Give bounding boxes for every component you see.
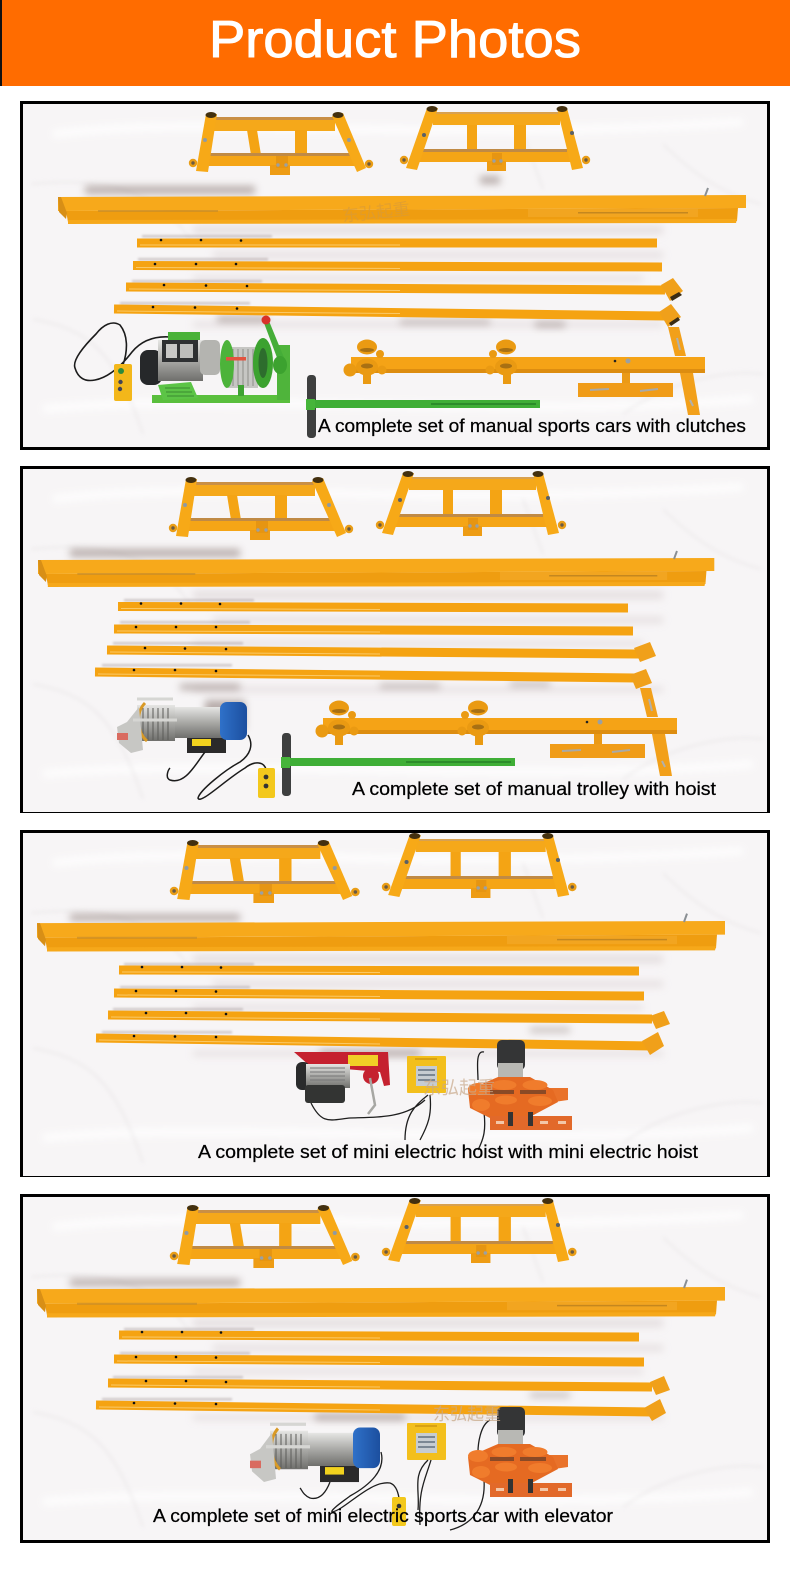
control cord [75, 323, 170, 380]
left trestle frame [170, 840, 360, 903]
rod end brackets [630, 642, 656, 689]
lower trolley assembly [316, 688, 677, 776]
title: Product Photos [209, 11, 581, 69]
panel: manual sports car set with clutch winch [22, 102, 768, 448]
watermark: 东弘起重 [423, 1078, 495, 1098]
shadows [70, 549, 550, 730]
shadows [70, 914, 570, 1056]
main beam [37, 914, 725, 951]
green hand crank [306, 375, 540, 438]
orange electric trolley [468, 1407, 572, 1497]
caption: A complete set of mini electric sports car with elevator [153, 1505, 613, 1526]
main beam [58, 188, 746, 224]
right trestle frame [400, 106, 590, 171]
rods [114, 239, 665, 316]
rod end brackets [642, 1011, 670, 1055]
red mini electric hoist [294, 1052, 390, 1114]
right trestle frame [382, 833, 577, 898]
control box [407, 1423, 446, 1460]
watermark: 东弘起重 [433, 1405, 501, 1424]
hoist control box [407, 1056, 446, 1093]
wiring [300, 1420, 490, 1530]
panel: mini electric sports car with elevator [22, 1196, 768, 1542]
shadows [70, 1279, 570, 1420]
yellow controller [258, 768, 275, 798]
electric winch [250, 1424, 380, 1482]
yellow controller [114, 364, 132, 401]
lower trolley assembly [344, 327, 705, 415]
rod end brackets [644, 1376, 670, 1421]
caption: A complete set of manual sports cars with clutches [318, 415, 746, 436]
yellow controller [392, 1497, 406, 1526]
power cords [167, 735, 266, 799]
main beam [38, 551, 714, 587]
rods [95, 602, 640, 678]
right trestle frame [382, 1198, 577, 1263]
rods [96, 966, 652, 1046]
right trestle frame [376, 471, 566, 536]
left trestle frame [169, 477, 353, 540]
caption: A complete set of mini electric hoist with mini electric hoist [198, 1141, 698, 1162]
left trestle frame [170, 1205, 360, 1268]
rod end brackets [659, 278, 683, 327]
left trestle frame [189, 112, 373, 175]
green manual clutch winch [140, 316, 290, 403]
orange electric trolley [468, 1040, 572, 1130]
caption: A complete set of manual trolley with hoist [352, 778, 716, 799]
wiring [311, 1052, 485, 1150]
green hand crank [281, 733, 515, 796]
electric winch [117, 699, 247, 753]
beam watermark: 东弘起重 [341, 200, 411, 226]
header banner [0, 0, 790, 86]
main beam [37, 1280, 725, 1317]
panel: mini electric hoist set [22, 832, 768, 1176]
shadows [85, 176, 565, 327]
panel: manual trolley with hoist [22, 468, 768, 812]
rods [96, 1331, 652, 1412]
